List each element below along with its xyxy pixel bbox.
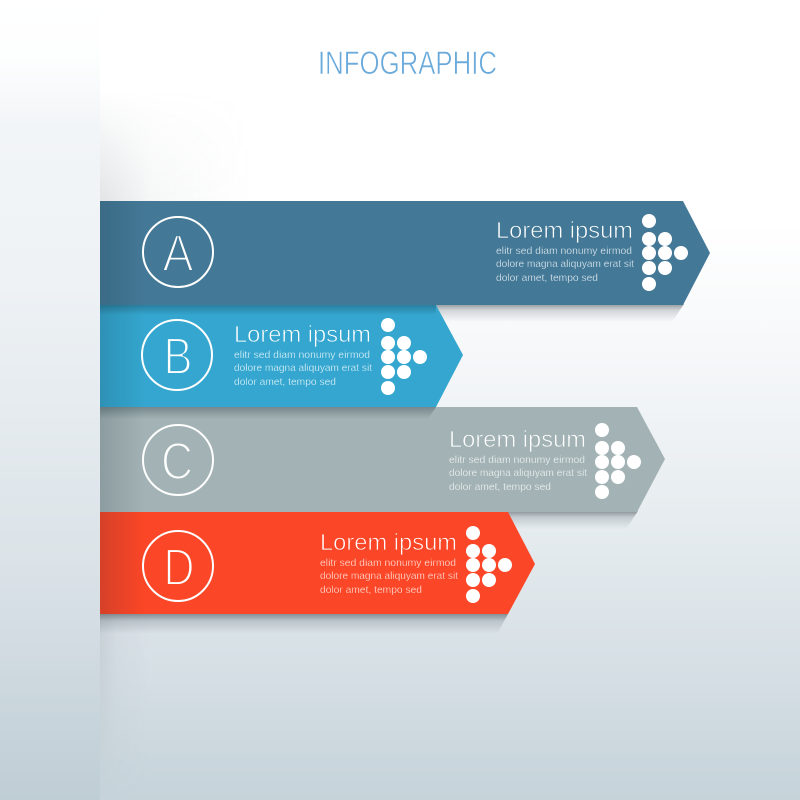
heading A: Lorem ipsum: [496, 217, 633, 243]
body text D: [320, 557, 458, 596]
body text B: dolore magna aliquyam erat sit: [234, 362, 372, 374]
shadow under band D: [100, 614, 508, 634]
badge A: A: [162, 225, 194, 283]
icon: dotted arrow B: [381, 318, 427, 395]
body text C: dolor amet, tempo sed: [449, 481, 551, 493]
shadow under band A: [436, 304, 684, 322]
body text A: [496, 245, 634, 284]
panel: band B: [100, 305, 463, 407]
icon: dotted arrow C: [595, 423, 641, 499]
body text A: elitr sed diam nonumy eirmod: [496, 245, 632, 257]
heading C: Lorem ipsum: [449, 426, 586, 452]
body text C: [449, 454, 587, 493]
body text D: elitr sed diam nonumy eirmod: [320, 557, 456, 569]
badge D: [143, 531, 213, 601]
panel: band A: [100, 201, 710, 305]
badge C: C: [161, 433, 193, 491]
icon: dotted arrow A: [642, 214, 688, 291]
badge B: [142, 320, 212, 390]
body text D: dolore magna aliquyam erat sit: [320, 570, 458, 582]
panel: band D: [100, 512, 535, 614]
body text B: dolor amet, tempo sed: [234, 376, 336, 388]
badge D: D: [164, 539, 194, 597]
body text D: dolor amet, tempo sed: [320, 584, 422, 596]
body text C: elitr sed diam nonumy eirmod: [449, 454, 585, 466]
shadow under band C: [508, 511, 638, 529]
title: INFOGRAPHIC: [318, 45, 497, 81]
body text C: dolore magna aliquyam erat sit: [449, 467, 587, 479]
body text A: dolor amet, tempo sed: [496, 272, 598, 284]
body text B: [234, 349, 372, 388]
badge B: B: [164, 328, 192, 386]
body text A: dolore magna aliquyam erat sit: [496, 258, 634, 270]
body text B: elitr sed diam nonumy eirmod: [234, 349, 370, 361]
icon: dotted arrow D: [466, 526, 512, 603]
badge A: [143, 217, 213, 287]
heading B: Lorem ipsum: [234, 321, 371, 347]
badge C: [143, 425, 213, 495]
heading D: Lorem ipsum: [320, 529, 457, 555]
panel: band C: [100, 407, 665, 512]
